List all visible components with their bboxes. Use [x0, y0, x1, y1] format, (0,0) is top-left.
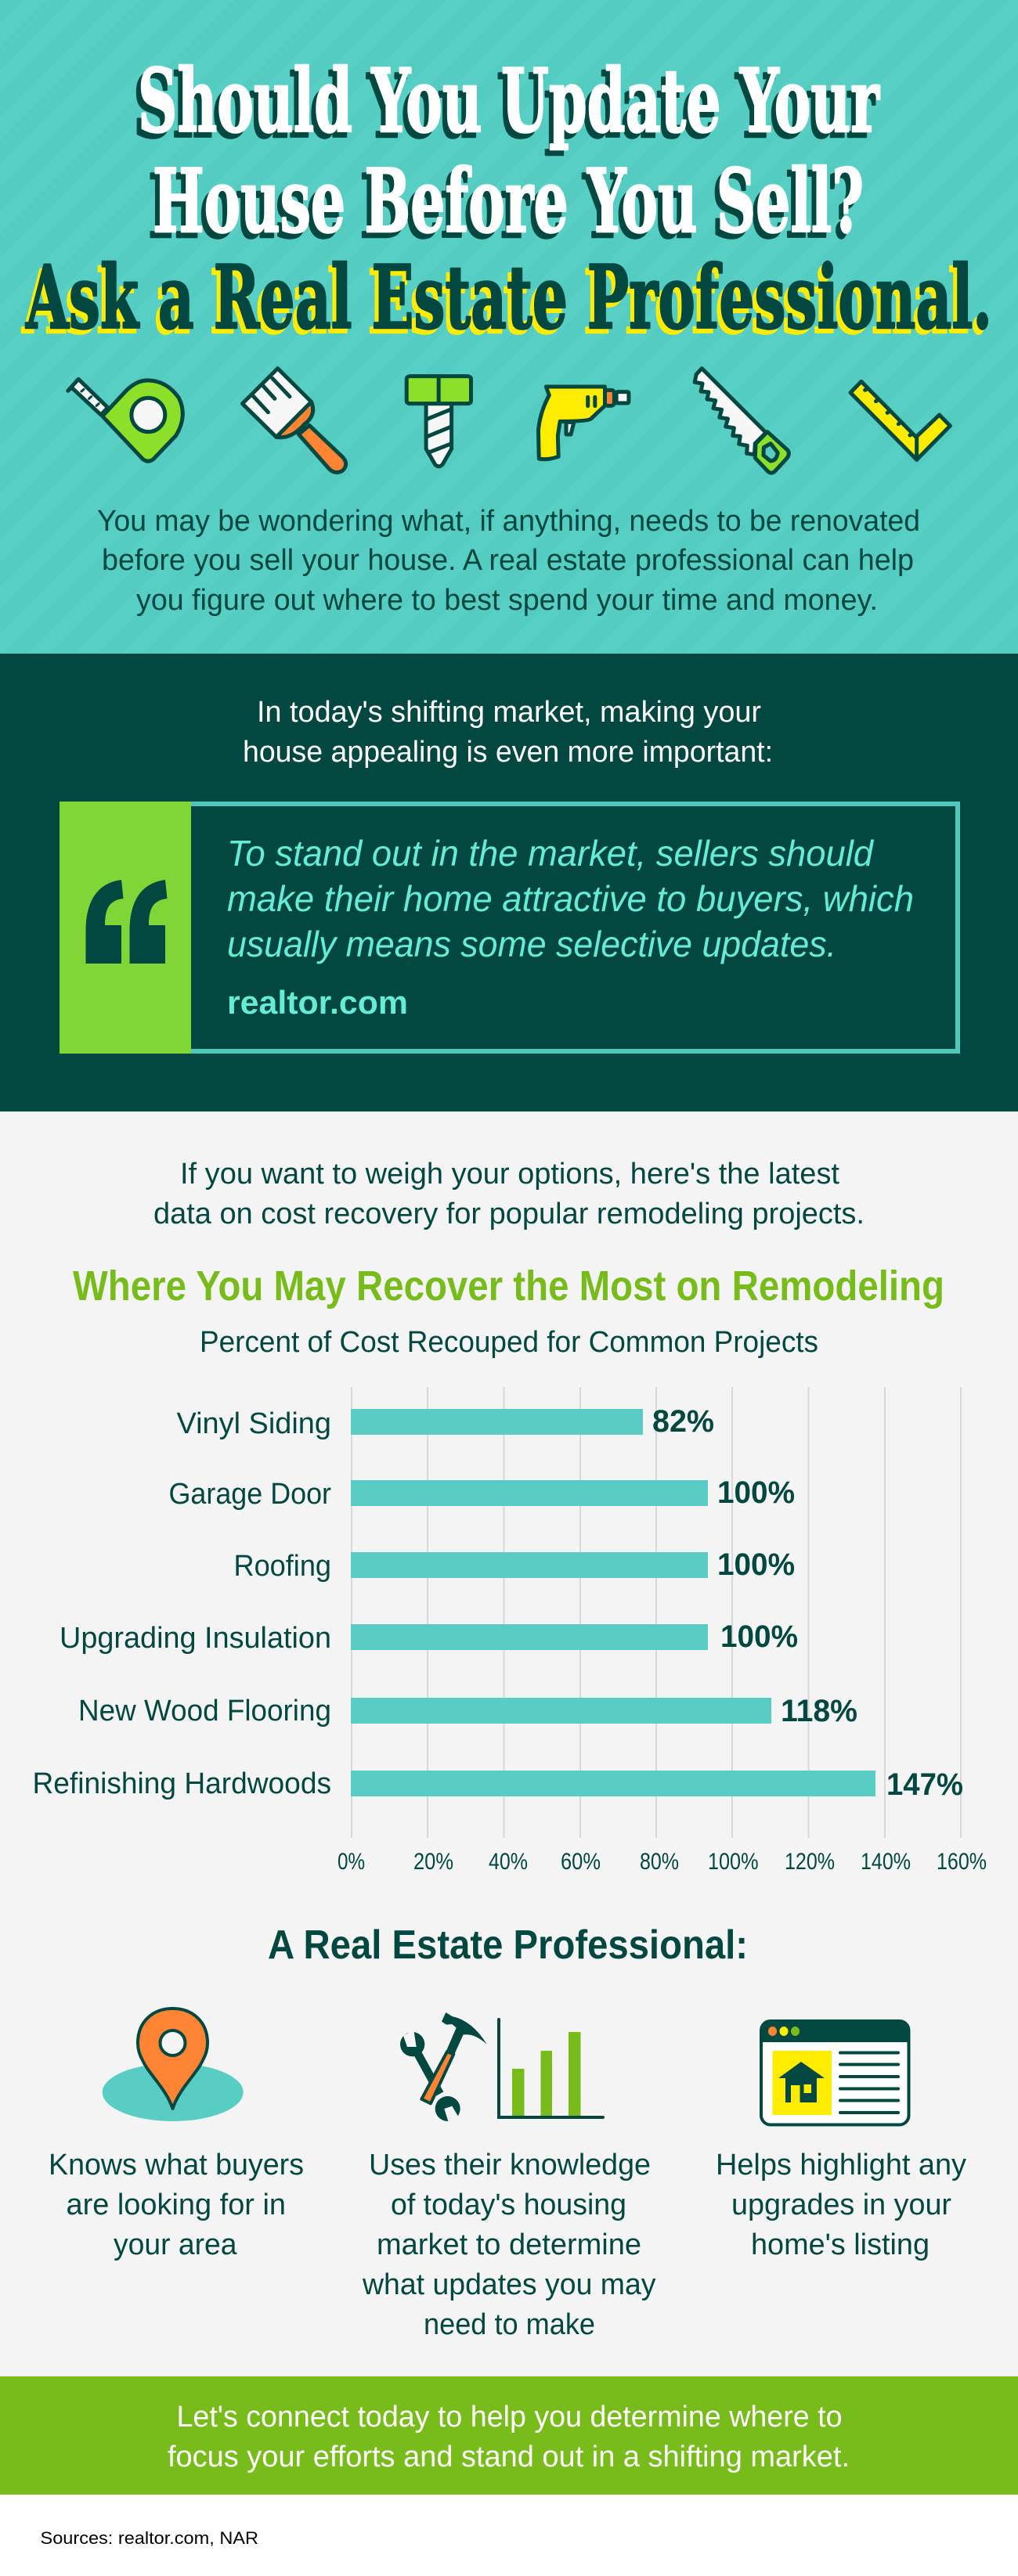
axis labels: 140% [861, 1849, 911, 1875]
category labels: New Wood Flooring [78, 1695, 331, 1728]
value labels: 82% [652, 1404, 714, 1439]
data intro text [153, 1158, 865, 1230]
value labels [652, 1404, 963, 1802]
panel: market quote [0, 654, 1018, 1111]
intro text: You may be wondering what, if anything, needs to be renovated [97, 505, 920, 538]
market intro text [243, 696, 773, 769]
intro text [97, 505, 920, 617]
value labels: 100% [717, 1547, 795, 1582]
value labels: 100% [717, 1475, 795, 1510]
category labels: Garage Door [169, 1478, 331, 1511]
call to action text: Let's connect today to help you determine where to [177, 2401, 843, 2434]
category labels: Refinishing Hardwoods [33, 1767, 331, 1800]
column text: knows what buyers [49, 2149, 304, 2261]
column text: helps highlight: upgrades in your [731, 2189, 951, 2221]
category labels: Upgrading Insulation [60, 1622, 331, 1655]
title [21, 51, 992, 354]
value labels: 118% [781, 1694, 857, 1728]
value labels: 147% [886, 1767, 963, 1802]
axis labels [338, 1849, 987, 1875]
icon: carpenter square [850, 381, 950, 459]
column text: helps highlight [716, 2149, 966, 2261]
category labels: Roofing [233, 1550, 331, 1583]
axis labels: 20% [413, 1849, 453, 1875]
chart subheading: Percent of Cost Recouped for Common Projects [200, 1326, 818, 1359]
quote source: realtor.com [227, 984, 408, 1021]
axis labels: 40% [489, 1849, 528, 1875]
market intro text: In today's shifting market, making your [257, 696, 761, 729]
quote box [60, 802, 958, 1054]
axis labels: 160% [937, 1849, 987, 1875]
panel: header [0, 0, 1018, 654]
quote text: usually means some selective updates. [227, 924, 836, 964]
column text: uses their knowledge: what updates you may [362, 2268, 656, 2301]
panel: call to action [0, 2376, 1018, 2495]
call to action text: focus your efforts and stand out in a shifting market. [168, 2441, 850, 2473]
data intro text: data on cost recovery for popular remodeling projects. [153, 1198, 865, 1230]
axis labels: 120% [785, 1849, 835, 1875]
panel: remodeling data [0, 1111, 1018, 2376]
bars [351, 1409, 875, 1796]
icon: rising bar chart [499, 2019, 603, 2117]
data intro text: If you want to weigh your options, here's the latest [180, 1158, 839, 1191]
icon: map pin [103, 2009, 244, 2121]
sources: Sources: realtor.com, NAR [41, 2528, 258, 2548]
icon: tools [400, 2012, 487, 2124]
axis labels: 100% [708, 1849, 758, 1875]
icon: paint brush [243, 369, 346, 473]
axis labels: 60% [561, 1849, 601, 1875]
column text: knows what buyers: your area [114, 2228, 237, 2261]
call to action text [168, 2401, 850, 2473]
column text: helps highlight: Helps highlight any [716, 2149, 966, 2181]
quote icon panel [60, 802, 191, 1054]
column text: helps highlight: home's listing [751, 2228, 930, 2261]
category labels [33, 1407, 331, 1800]
quote text: make their home attractive to buyers, which [227, 878, 914, 919]
bar chart [33, 1387, 987, 1875]
icon: hand saw [695, 369, 789, 473]
intro text: you figure out where to best spend your time and money. [136, 584, 878, 617]
column text: uses their knowledge [362, 2149, 656, 2341]
axis labels: 80% [640, 1849, 679, 1875]
intro text: before you sell your house. A real estate professional can help [102, 544, 914, 577]
column text: uses their knowledge: market to determine [377, 2228, 641, 2261]
column text: uses their knowledge: of today's housing [391, 2189, 626, 2221]
market intro text: house appealing is even more important: [243, 736, 773, 769]
quote text: To stand out in the market, sellers should [227, 833, 874, 874]
icon: tape measure [68, 379, 182, 461]
value labels: 100% [720, 1619, 798, 1654]
axis labels: 0% [338, 1849, 365, 1875]
column text: knows what buyers: Knows what buyers [49, 2149, 304, 2181]
column text: uses their knowledge: need to make [424, 2308, 595, 2341]
section heading: a real estate professional: A Real Estate Professional: [268, 1922, 748, 1968]
column text: knows what buyers: are looking for in [66, 2189, 286, 2221]
column text: uses their knowledge: Uses their knowledge [369, 2149, 651, 2181]
icon: screw [406, 376, 471, 467]
category labels: Vinyl Siding [177, 1407, 331, 1440]
quote text [227, 833, 914, 964]
icon: drill [538, 387, 629, 459]
icon: home listing [760, 2020, 910, 2124]
